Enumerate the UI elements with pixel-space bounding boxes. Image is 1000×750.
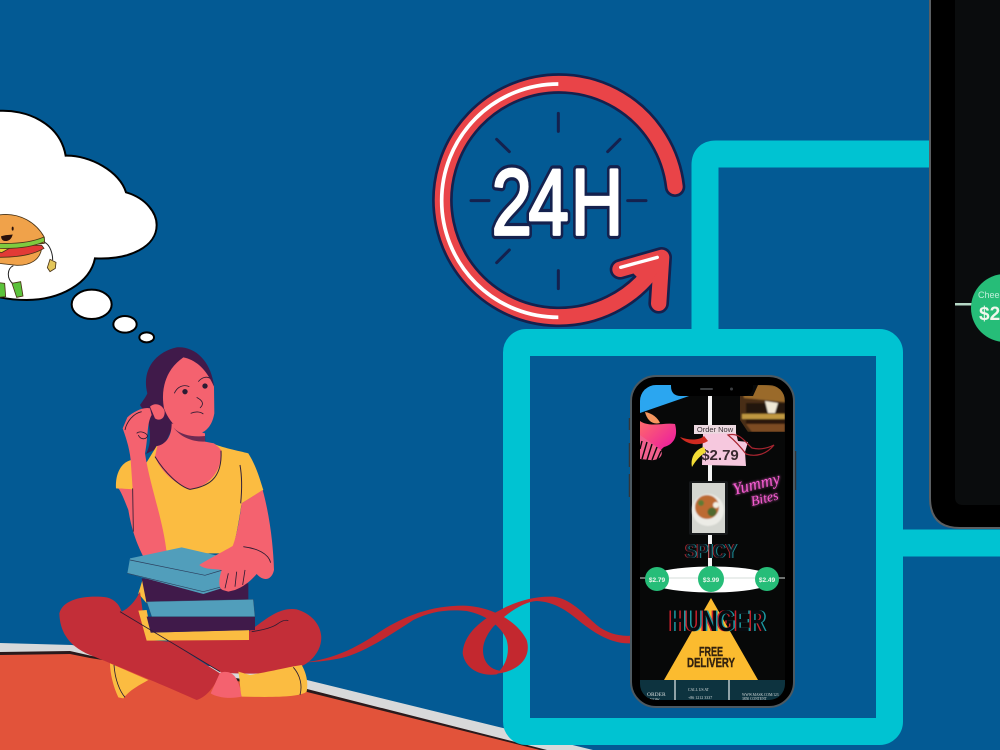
phone footer: +86 1212 3337 xyxy=(688,695,712,700)
spicy heading: SPICY xyxy=(684,541,737,563)
left shoe xyxy=(110,663,148,698)
free delivery label: DELIVERY xyxy=(687,656,736,670)
facial features xyxy=(125,377,210,532)
phone footer: 3850 CONTENT xyxy=(742,697,768,701)
price badge center: $3.99 xyxy=(703,577,720,584)
hunger heading xyxy=(670,610,766,632)
right shoe xyxy=(238,665,307,697)
white price band xyxy=(662,566,760,592)
phone footer: WWW.MASK.COM/123 xyxy=(742,693,779,697)
floor xyxy=(0,643,593,750)
neck shadow xyxy=(173,427,205,442)
burger photo xyxy=(738,384,785,432)
top blue book xyxy=(127,547,253,594)
phone footer xyxy=(640,680,785,702)
free delivery label: FREE xyxy=(699,645,723,659)
face xyxy=(163,357,214,435)
shirt xyxy=(116,443,263,603)
right arm and hand xyxy=(199,490,274,592)
neon yummy bites xyxy=(731,474,782,508)
free delivery label xyxy=(688,646,735,668)
phone footer: ORDER xyxy=(647,692,666,698)
tablet device xyxy=(930,0,1000,528)
hunger heading: HUNGER xyxy=(671,605,767,638)
price tag: $2.79 xyxy=(701,447,739,464)
spicy heading xyxy=(684,544,738,558)
phone notch xyxy=(671,384,753,396)
price badge left xyxy=(645,567,669,591)
hunger heading: HUNGER xyxy=(668,605,764,638)
hair xyxy=(140,347,214,454)
lower dark book xyxy=(147,617,255,633)
legs xyxy=(59,592,321,700)
thought bubbles xyxy=(72,290,154,342)
24H label: 24H xyxy=(491,150,623,255)
yellow book xyxy=(138,610,249,641)
price tag xyxy=(701,433,748,466)
hunger heading: HUNGER xyxy=(670,605,766,638)
phone footer: CALL US AT xyxy=(688,688,710,692)
tablet screen xyxy=(955,0,1000,505)
cloud shape xyxy=(0,111,157,300)
dark book xyxy=(142,578,248,603)
middle blue book xyxy=(147,599,255,617)
phone side buttons xyxy=(630,418,795,497)
tablet price connector xyxy=(955,303,973,306)
burger shoes xyxy=(0,282,23,297)
phone xyxy=(630,376,795,707)
ear xyxy=(150,404,165,420)
woman reading xyxy=(59,347,321,700)
collar line xyxy=(155,451,242,503)
price badge left: $2.79 xyxy=(649,577,666,584)
burger mouth xyxy=(1,234,13,241)
clock ticks xyxy=(471,113,646,289)
blue corner shape xyxy=(640,385,692,413)
yellow triangle xyxy=(664,598,758,680)
food photo xyxy=(689,481,728,535)
shoe lines xyxy=(114,665,301,697)
neon yummy bites: Bites xyxy=(749,488,781,510)
left arm xyxy=(118,408,167,562)
neon yummy bites: Yummy xyxy=(730,469,782,499)
ribbon xyxy=(303,597,632,675)
24H label: 24H xyxy=(491,150,623,255)
price badge right: $2.49 xyxy=(759,577,776,584)
phone footer: NOW xyxy=(650,697,660,702)
center timeline xyxy=(708,396,712,566)
arm line details xyxy=(120,547,288,672)
tablet price badge xyxy=(971,274,1000,342)
price badge center xyxy=(698,566,724,592)
ankle xyxy=(211,672,242,698)
connector frames xyxy=(516,154,1000,732)
phone body xyxy=(631,376,794,707)
neck and chest xyxy=(155,423,222,489)
burger character xyxy=(0,214,56,297)
price badge right xyxy=(755,567,779,591)
spicy heading: SPICY xyxy=(685,541,738,563)
spicy heading: SPICY xyxy=(686,541,739,563)
chili peppers xyxy=(680,434,774,467)
pink comb decoration xyxy=(640,412,676,460)
thought cloud xyxy=(0,111,157,342)
24h clock icon xyxy=(442,84,675,317)
order now tag: Order Now xyxy=(697,425,734,434)
phone screen xyxy=(640,384,785,702)
clock ring xyxy=(442,84,675,317)
burger limbs xyxy=(8,242,53,284)
